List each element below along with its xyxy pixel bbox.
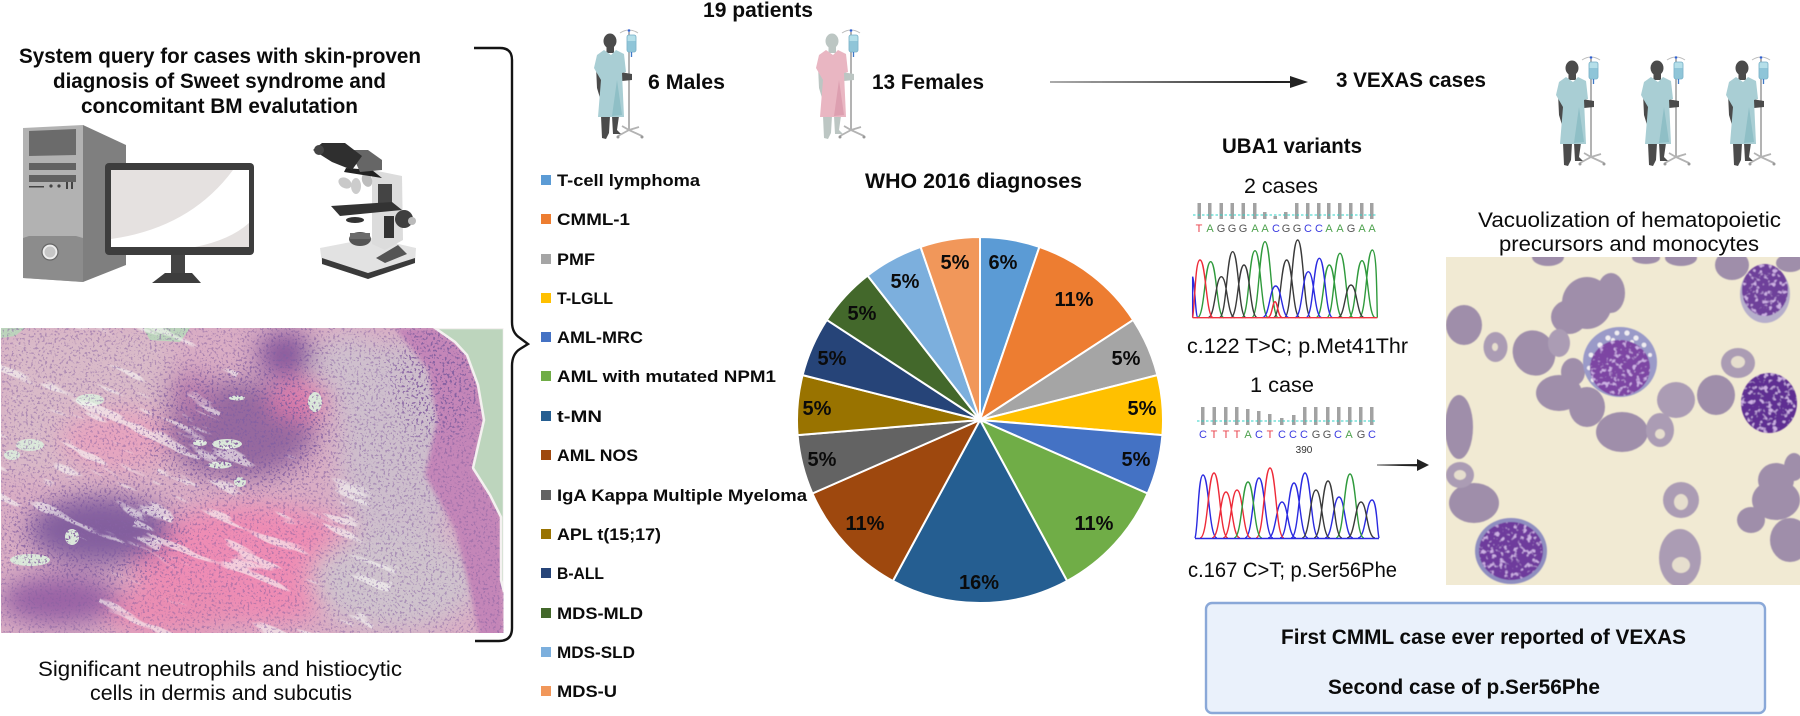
chromatogram: c.167 C>T: C <box>1199 429 1207 441</box>
chromatogram: c.167 C>T: C <box>1289 429 1297 441</box>
chromatogram: c.167 C>T: A <box>1244 429 1252 441</box>
pie percentage labels: 11% <box>846 513 885 535</box>
caption: vacuolization <box>1478 209 1781 256</box>
chromatogram: c.122 T>C: G <box>1228 223 1236 235</box>
legend: WHO 2016 diagnoses: T-LGLL <box>557 289 613 308</box>
arrow: to VEXAS cases <box>1050 76 1308 88</box>
pie percentage labels: 6% <box>989 252 1018 274</box>
callout: key findings <box>1206 603 1765 713</box>
chromatogram: c.167 C>T: G <box>1312 429 1320 441</box>
pie percentage labels: 5% <box>941 252 970 274</box>
chromatogram: c.167 C>T: C <box>1368 429 1376 441</box>
pie percentage labels: 5% <box>1112 348 1141 370</box>
chromatogram: c.122 T>C: G <box>1217 223 1225 235</box>
heading: system query: concomitant BM evalutation <box>81 95 358 118</box>
chromatogram: c.167 C>T: C <box>1334 429 1342 441</box>
pie percentage labels: 5% <box>848 303 877 325</box>
chromatogram: c.122 T>C: T <box>1196 223 1203 235</box>
chromatogram: c.122 T>C: G <box>1347 223 1355 235</box>
icon: three VEXAS patients <box>1556 56 1776 166</box>
chromatogram: c.167 C>T: G <box>1357 429 1365 441</box>
chromatogram: c.167 C>T: C <box>1255 429 1263 441</box>
caption: histology findings: cells in dermis and subcutis <box>90 682 352 705</box>
bracket <box>474 48 528 641</box>
caption: vacuolization: Vacuolization of hematopoietic <box>1478 209 1781 232</box>
chromatogram: c.167 C>T: T <box>1211 429 1218 441</box>
icon: desktop computer <box>23 125 254 283</box>
arrow: to marrow smear <box>1377 459 1429 471</box>
label: 3 VEXAS cases: 3 VEXAS cases <box>1336 69 1486 92</box>
legend: WHO 2016 diagnoses: AML with mutated NPM1 <box>557 367 776 386</box>
heading: WHO 2016 diagnoses: WHO 2016 diagnoses <box>865 170 1082 193</box>
pie chart: diagnoses <box>797 237 1163 603</box>
icon: microscope <box>313 143 416 279</box>
pie percentage labels: 5% <box>1128 398 1157 420</box>
label: 1 case: 1 case <box>1250 374 1314 397</box>
pie percentage labels: 5% <box>1122 449 1151 471</box>
icon: female patient with IV <box>816 29 866 139</box>
chromatogram: c.167 C>T: A <box>1345 429 1353 441</box>
chromatogram: c.167 C>T: T <box>1267 429 1274 441</box>
chromatogram: c.167 C>T: T <box>1223 429 1230 441</box>
caption: histology findings: Significant neutrophils and histiocytic <box>38 658 402 681</box>
chromatogram: c.122 T>C: G <box>1239 223 1247 235</box>
legend: WHO 2016 diagnoses: MDS-MLD <box>557 604 643 623</box>
chromatogram: c.122 T>C: A <box>1325 223 1333 235</box>
panel: system query <box>19 45 421 283</box>
chromatogram: c.122 T>C: A <box>1336 223 1344 235</box>
legend: WHO 2016 diagnoses: t-MN <box>557 407 602 426</box>
pie percentage labels: 11% <box>1055 289 1094 311</box>
label: 2 cases: 2 cases <box>1244 175 1318 198</box>
chromatogram: c.122 T>C: A <box>1206 223 1214 235</box>
chromatogram: c.122 T>C: C <box>1315 223 1323 235</box>
legend: WHO 2016 diagnoses: IgA Kappa Multiple Myeloma <box>557 486 808 505</box>
heading: system query: diagnosis of Sweet syndrome and <box>53 70 386 93</box>
label: c.122 T>C; p.Met41Thr: c.122 T>C; p.Met41Thr <box>1187 335 1408 358</box>
pie percentage labels: 5% <box>808 449 837 471</box>
heading: UBA1 variants: UBA1 variants <box>1222 135 1362 158</box>
legend: WHO 2016 diagnoses: T-cell lymphoma <box>557 171 701 190</box>
label: 13 females: 13 Females <box>872 71 984 94</box>
chromatogram: c.167 C>T: C <box>1300 429 1308 441</box>
pie percentage labels: 5% <box>891 271 920 293</box>
legend: WHO 2016 diagnoses: MDS-SLD <box>557 643 635 662</box>
chromatogram: c.122 T>C: A <box>1368 223 1376 235</box>
label: 6 males: 6 Males <box>648 71 725 94</box>
chromatogram: c.122 T>C: G <box>1293 223 1301 235</box>
legend: WHO 2016 diagnoses: MDS-U <box>557 682 617 701</box>
panel: UBA1 variants <box>1187 135 1408 582</box>
chromatogram: c.122 T>C: G <box>1282 223 1290 235</box>
caption: histology findings <box>38 658 402 705</box>
callout: key findings: Second case of p.Ser56Phe <box>1328 676 1600 699</box>
pie percentage labels: 5% <box>818 348 847 370</box>
chromatogram: c.167 C>T: G <box>1323 429 1331 441</box>
chromatogram: c.122 T>C: A <box>1261 223 1269 235</box>
caption: vacuolization: precursors and monocytes <box>1499 233 1759 256</box>
photo: skin biopsy histology <box>1 328 504 633</box>
callout: key findings: First CMML case ever reported of VEXAS <box>1281 626 1686 649</box>
pie percentage labels: 16% <box>959 572 999 594</box>
photo: bone marrow smear <box>1445 248 1800 587</box>
label: c.167 C>T; p.Ser56Phe: c.167 C>T; p.Ser56Phe <box>1188 559 1397 582</box>
chromatogram: c.122 T>C: C <box>1304 223 1312 235</box>
label: position 390: 390 <box>1296 445 1313 456</box>
chromatogram: c.122 T>C: A <box>1358 223 1366 235</box>
legend: WHO 2016 diagnoses <box>541 171 808 701</box>
chromatogram: c.167 C>T: T <box>1234 429 1241 441</box>
chromatogram: c.122 T>C: C <box>1272 223 1280 235</box>
chromatogram: c.122 T>C: A <box>1251 223 1259 235</box>
chromatogram: c.122 T>C <box>1193 203 1377 318</box>
legend: WHO 2016 diagnoses: B-ALL <box>557 564 604 583</box>
heading: system query <box>19 45 421 118</box>
icon: male patient with IV <box>594 29 644 139</box>
legend: WHO 2016 diagnoses: PMF <box>557 250 595 269</box>
legend: WHO 2016 diagnoses: APL t(15;17) <box>557 525 661 544</box>
legend: WHO 2016 diagnoses: AML-MRC <box>557 328 643 347</box>
legend: WHO 2016 diagnoses: CMML-1 <box>557 210 630 229</box>
chromatogram: c.167 C>T <box>1195 407 1379 538</box>
heading: system query: System query for cases with skin-proven <box>19 45 421 68</box>
legend: WHO 2016 diagnoses: AML NOS <box>557 446 638 465</box>
pie percentage labels <box>803 252 1157 594</box>
pie percentage labels: 5% <box>803 398 832 420</box>
pie percentage labels: 11% <box>1075 513 1114 535</box>
chromatogram: c.167 C>T: C <box>1278 429 1286 441</box>
